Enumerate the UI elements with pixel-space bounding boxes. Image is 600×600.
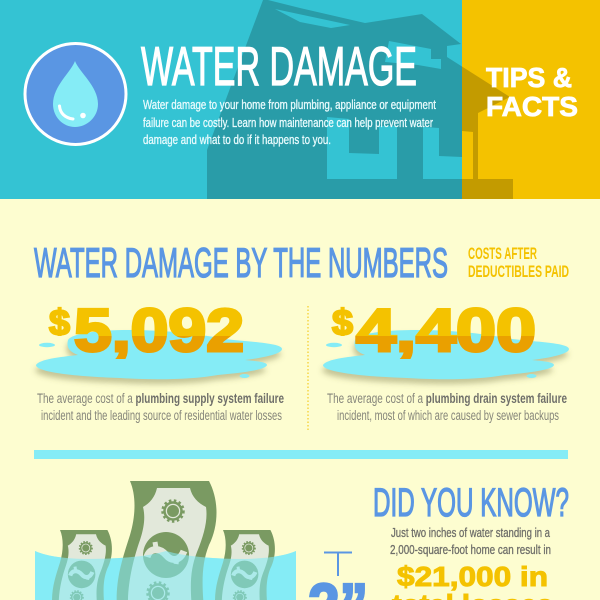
panel: did you know [373, 481, 569, 600]
puddle [35, 330, 282, 384]
description [37, 391, 284, 423]
description: incident and the leading source of residential water losses [41, 408, 282, 423]
title: WATER DAMAGE [141, 35, 417, 97]
illustration: money bills in water [35, 481, 296, 600]
figure: $5,092 [48, 306, 243, 359]
tips and facts label: TIPS & [486, 62, 572, 93]
body text: 2,000-square-foot home can result in [390, 542, 551, 557]
intro text: Water damage to your home from plumbing, appliance or equipment [143, 98, 436, 112]
figure: $5,092: 5,092 [74, 297, 244, 364]
panel: plumbing supply cost [35, 297, 284, 423]
header teal band [0, 0, 462, 199]
figure: $5,092: $ [49, 302, 70, 343]
water height marker [308, 552, 368, 600]
house silhouette [207, 0, 513, 199]
intro text: damage and what to do if it happens to you. [143, 133, 331, 147]
subheading: costs after deductibles: COSTS AFTER [468, 245, 537, 263]
puddle [322, 330, 569, 384]
section divider bar [34, 450, 568, 459]
description: The average cost of a plumbing supply system failure [37, 391, 284, 406]
header yellow band [462, 0, 600, 199]
figure: $5,092: 5,092 [74, 297, 244, 364]
subheading: costs after deductibles [468, 245, 569, 281]
dotted divider [307, 306, 309, 430]
icon: water drop badge [25, 44, 126, 144]
figure: $4,400 [331, 306, 535, 359]
figure: $4,400: 4,400 [356, 297, 536, 364]
total losses figure: $21,000 in [397, 561, 548, 592]
panel: header [0, 0, 600, 199]
tips and facts label: FACTS [486, 91, 578, 122]
figure: $4,400: 4,400 [356, 297, 536, 364]
intro text [143, 98, 436, 147]
tips and facts label [486, 62, 578, 122]
intro text: failure can be costly. Learn how maintenance can help prevent water [143, 116, 433, 130]
figure: $4,400: $ [332, 302, 353, 343]
description [327, 391, 567, 423]
total losses figure [392, 564, 550, 600]
panel: plumbing drain cost [322, 297, 569, 423]
body text [390, 525, 551, 557]
